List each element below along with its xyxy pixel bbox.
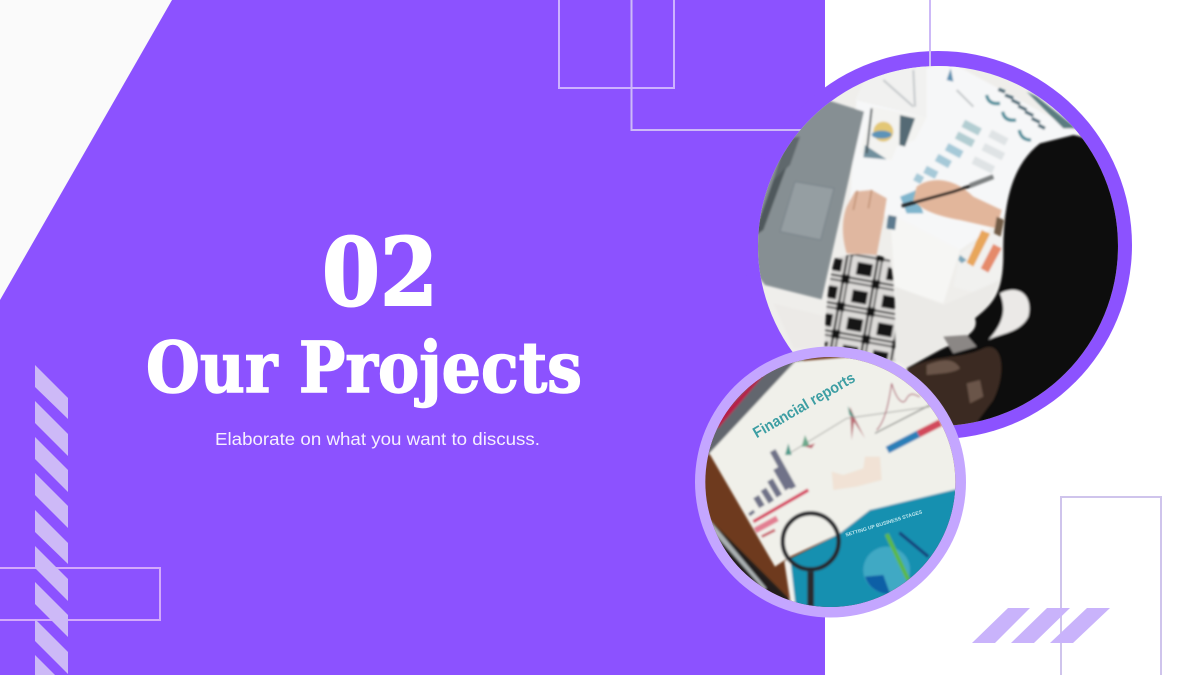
magnifier: [806, 570, 816, 606]
heading: Our Projects: [146, 326, 582, 409]
top outline square: [559, 0, 674, 88]
orange bars: [967, 230, 990, 267]
teal panel: [790, 488, 956, 607]
checked sleeve: [825, 254, 895, 362]
laptop: [758, 100, 865, 300]
laptop corner and red cover: [708, 360, 804, 456]
diagonal stripe column: [35, 365, 68, 675]
right outline rectangle: [1061, 497, 1161, 675]
bars: [915, 123, 1007, 181]
paper sheets: [850, 60, 1080, 250]
icon: three slanted stripes: [972, 608, 1110, 643]
pie and chart on sheet: [873, 122, 893, 142]
blue and red bars: [887, 434, 918, 450]
left hand with fingers: [843, 190, 887, 255]
teal panel labels: [863, 547, 910, 593]
top outline rectangle: [632, 0, 930, 130]
arm and writing hand: [913, 180, 1002, 228]
background: off-white corner: [0, 0, 172, 300]
red data strip: [753, 490, 808, 522]
left outline rectangle: [0, 568, 160, 620]
section number: 02: [322, 218, 438, 328]
subtitle: Elaborate on what you want to discuss.: [215, 429, 540, 449]
grey bar chart: [751, 451, 793, 514]
purple angled panel: [0, 0, 825, 675]
pens: [887, 534, 908, 580]
pen: [902, 185, 973, 206]
faint area chart: [832, 457, 882, 490]
big circle ring: [744, 51, 1132, 439]
line charts: [787, 407, 930, 455]
photo: woman analysing charts: [758, 66, 1118, 426]
report sheet: [709, 347, 967, 567]
hair: [907, 135, 1120, 424]
photo: financial reports on desk: [705, 357, 956, 607]
table: [773, 303, 827, 348]
chart heading in photo: Financial reports: [750, 370, 858, 442]
small circle ring: [695, 346, 966, 618]
teal panel caption in photo: SETTING UP BUSINESS STAGES: [845, 509, 924, 539]
